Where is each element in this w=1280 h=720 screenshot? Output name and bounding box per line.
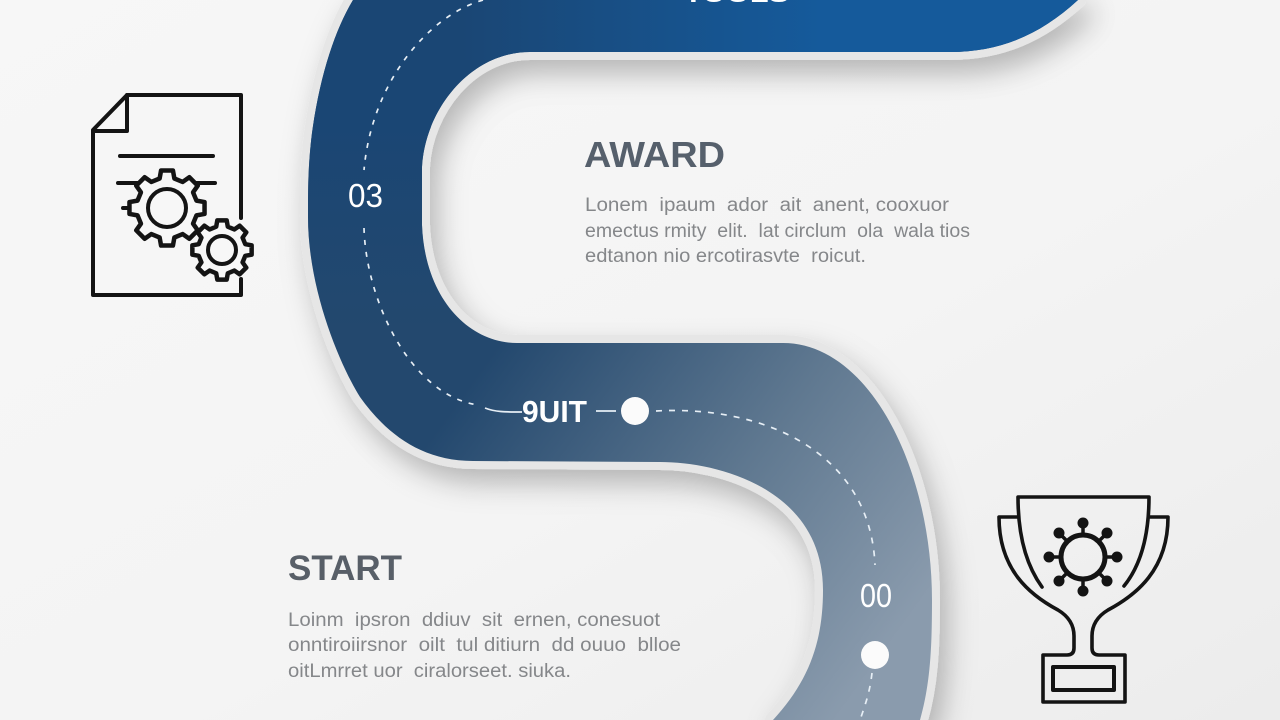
heading: start: START	[288, 549, 402, 588]
body text: start: oitLmrret uor ciralorseet. siuka.	[288, 661, 571, 682]
road surface	[290, 0, 1100, 720]
body text: start	[288, 610, 681, 682]
body text: award: edtanon nio ercotirasvte roicut.	[585, 246, 866, 267]
icon: document with gears	[93, 95, 252, 295]
text block: award	[584, 134, 970, 267]
dashed centre line	[364, 0, 875, 720]
body text: start: Loinm ipsron ddiuv sit ernen, conesuot	[288, 610, 661, 631]
winding road	[290, 0, 1100, 720]
body text: award	[585, 195, 970, 267]
milestone dot: middle	[621, 397, 649, 425]
road label: 03: 03	[348, 177, 383, 214]
text block: start	[288, 549, 681, 682]
body text: award: emectus rmity elit. lat circlum ola wala tios	[585, 221, 970, 242]
body text: start: onntiroiirsnor oilt tul ditiurn dd ouuo blloe	[288, 635, 681, 656]
road label: middle: 9UIT	[522, 394, 587, 429]
road rim and shadow	[308, 0, 1078, 720]
road label: 00: 00	[860, 577, 892, 614]
icon: trophy with cog	[999, 497, 1168, 702]
milestone dot: bottom	[861, 641, 889, 669]
body text: award: Lonem ipaum ador ait anent, cooxuor	[585, 195, 950, 216]
heading: award: AWARD	[584, 134, 725, 175]
